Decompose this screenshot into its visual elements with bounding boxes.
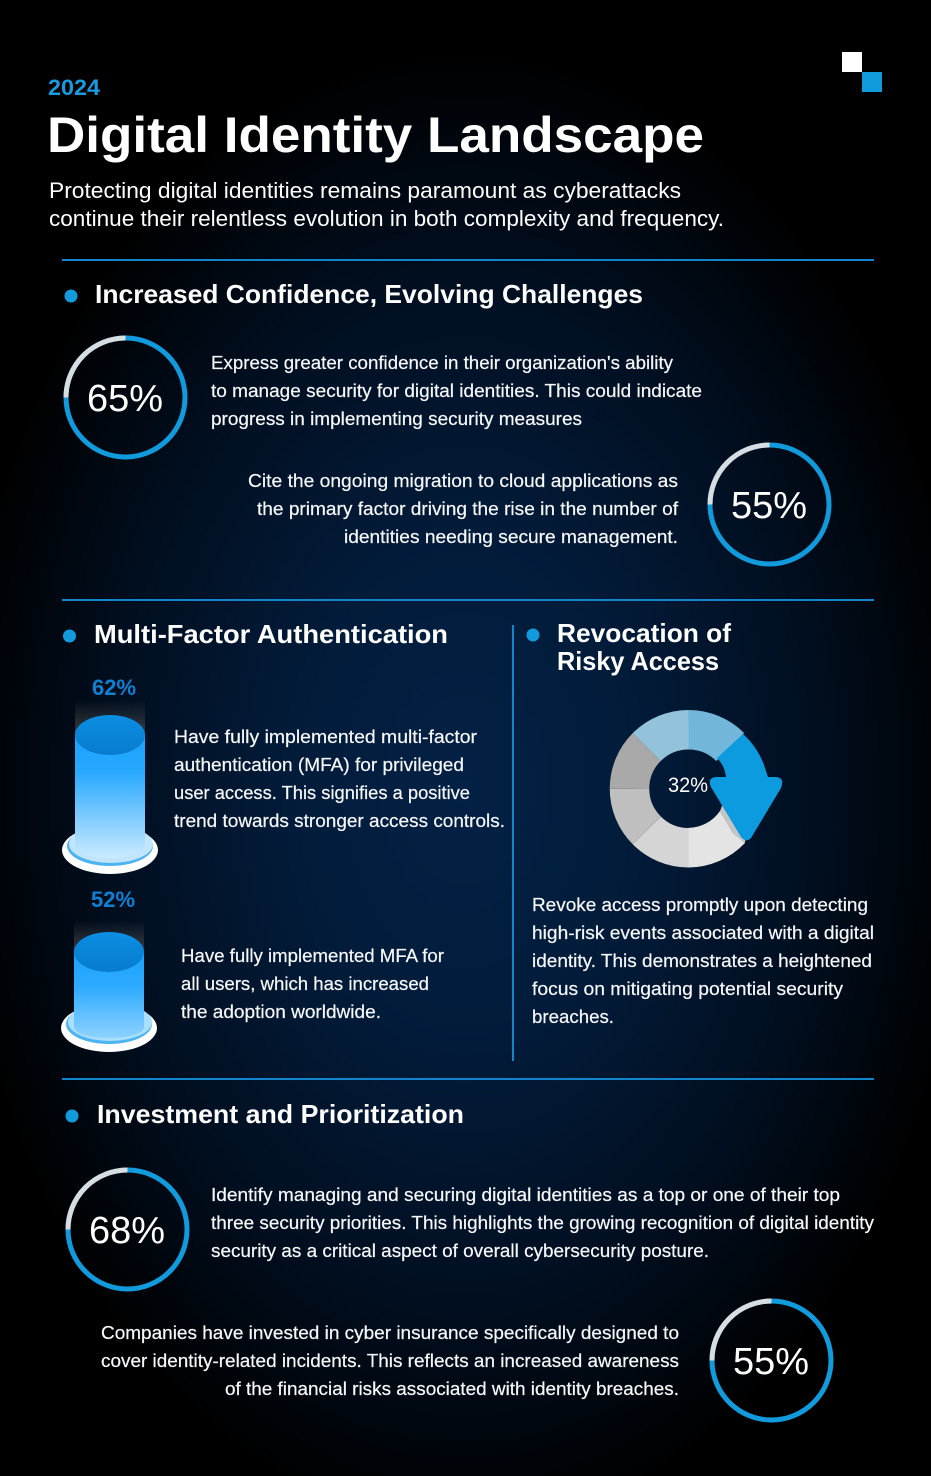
text: revoke access: identity. This demonstrates a heightened xyxy=(532,951,872,971)
text: cloud migration: identities needing secure management. xyxy=(344,527,678,547)
ring: 55% xyxy=(710,445,829,564)
text: revoke access: Revoke access promptly upon detecting xyxy=(532,895,868,915)
text: priorities: Identify managing and securing digital identities as a top or one of their top xyxy=(211,1185,840,1205)
text: all users MFA xyxy=(181,946,444,1022)
intro text: Protecting digital identities remains paramount as cyberattacks xyxy=(49,178,681,203)
ring: 55% insurance xyxy=(712,1301,831,1420)
text: privileged MFA: user access. This signifies a positive xyxy=(174,783,470,803)
section dividers xyxy=(62,259,874,1080)
text: confidence: to manage security for digital identities. This could indicate xyxy=(211,381,702,401)
text: confidence: progress in implementing security measures xyxy=(211,409,582,429)
text: cloud migration xyxy=(248,471,679,547)
text: cyber insurance: cover identity-related incidents. This reflects an increased awareness xyxy=(101,1351,679,1371)
heading: revocation xyxy=(526,618,731,676)
label: 52%: 52% xyxy=(91,887,135,912)
text: revoke access xyxy=(532,895,874,1027)
text: cyber insurance: Companies have invested in cyber insurance specifically designed to xyxy=(101,1323,679,1343)
heading: revocation: Revocation of xyxy=(557,618,731,648)
heading: increased confidence: Increased Confidence, Evolving Challenges xyxy=(95,279,643,309)
logo: two squares xyxy=(842,52,882,92)
ring: 55% insurance: 55% xyxy=(733,1341,809,1383)
heading: MFA: Multi-Factor Authentication xyxy=(94,619,448,649)
text: cloud migration: Cite the ongoing migration to cloud applications as xyxy=(248,471,678,491)
text: confidence xyxy=(211,353,702,429)
year label: 2024 xyxy=(48,75,101,100)
label: 62%: 62% xyxy=(92,675,136,700)
ring: 55%: 55% xyxy=(731,485,807,527)
panel: multi-factor authentication xyxy=(61,619,505,1052)
heading: investment: Investment and Prioritization xyxy=(97,1099,464,1129)
text: all users MFA: Have fully implemented MFA for xyxy=(181,946,444,966)
text: priorities: security as a critical aspect of overall cybersecurity posture. xyxy=(211,1241,709,1261)
intro text xyxy=(49,178,724,231)
heading: revocation: Risky Access xyxy=(557,646,719,676)
ring: 68%: 68% xyxy=(89,1210,165,1252)
text: all users MFA: the adoption worldwide. xyxy=(181,1002,381,1022)
title: Digital Identity Landscape xyxy=(47,107,704,163)
ring: 65% xyxy=(66,338,185,457)
text: revoke access: focus on mitigating potential security xyxy=(532,979,843,999)
icon: cylinder 52% xyxy=(61,920,157,1052)
text: privileged MFA: authentication (MFA) for privileged xyxy=(174,755,464,775)
text: privileged MFA: trend towards stronger access controls. xyxy=(174,811,505,831)
panel: revocation of risky access xyxy=(526,618,874,1027)
ring: 65%: 65% xyxy=(87,378,163,420)
text: cyber insurance: of the financial risks associated with identity breaches. xyxy=(225,1379,679,1399)
text: revoke access: high-risk events associated with a digital xyxy=(532,923,874,943)
text: all users MFA: all users, which has increased xyxy=(181,974,429,994)
icon: cylinder 62% xyxy=(62,700,158,874)
chart: donut 32% xyxy=(630,730,782,868)
text: priorities: three security priorities. This highlights the growing recognition of digital identity xyxy=(211,1213,874,1233)
panel: investment and prioritization xyxy=(66,1099,874,1420)
ring: 68% xyxy=(68,1170,187,1289)
intro text: continue their relentless evolution in both complexity and frequency. xyxy=(49,206,724,231)
text: privileged MFA xyxy=(174,727,505,831)
text: confidence: Express greater confidence in their organization's ability xyxy=(211,353,673,373)
label: 32%: 32% xyxy=(668,774,708,797)
icon: down arrow xyxy=(710,734,782,840)
text: revoke access: breaches. xyxy=(532,1007,614,1027)
text: priorities xyxy=(211,1185,874,1261)
panel: increased confidence xyxy=(64,279,829,564)
text: privileged MFA: Have fully implemented multi-factor xyxy=(174,727,477,747)
text: cyber insurance xyxy=(101,1323,679,1399)
text: cloud migration: the primary factor driving the rise in the number of xyxy=(257,499,679,519)
